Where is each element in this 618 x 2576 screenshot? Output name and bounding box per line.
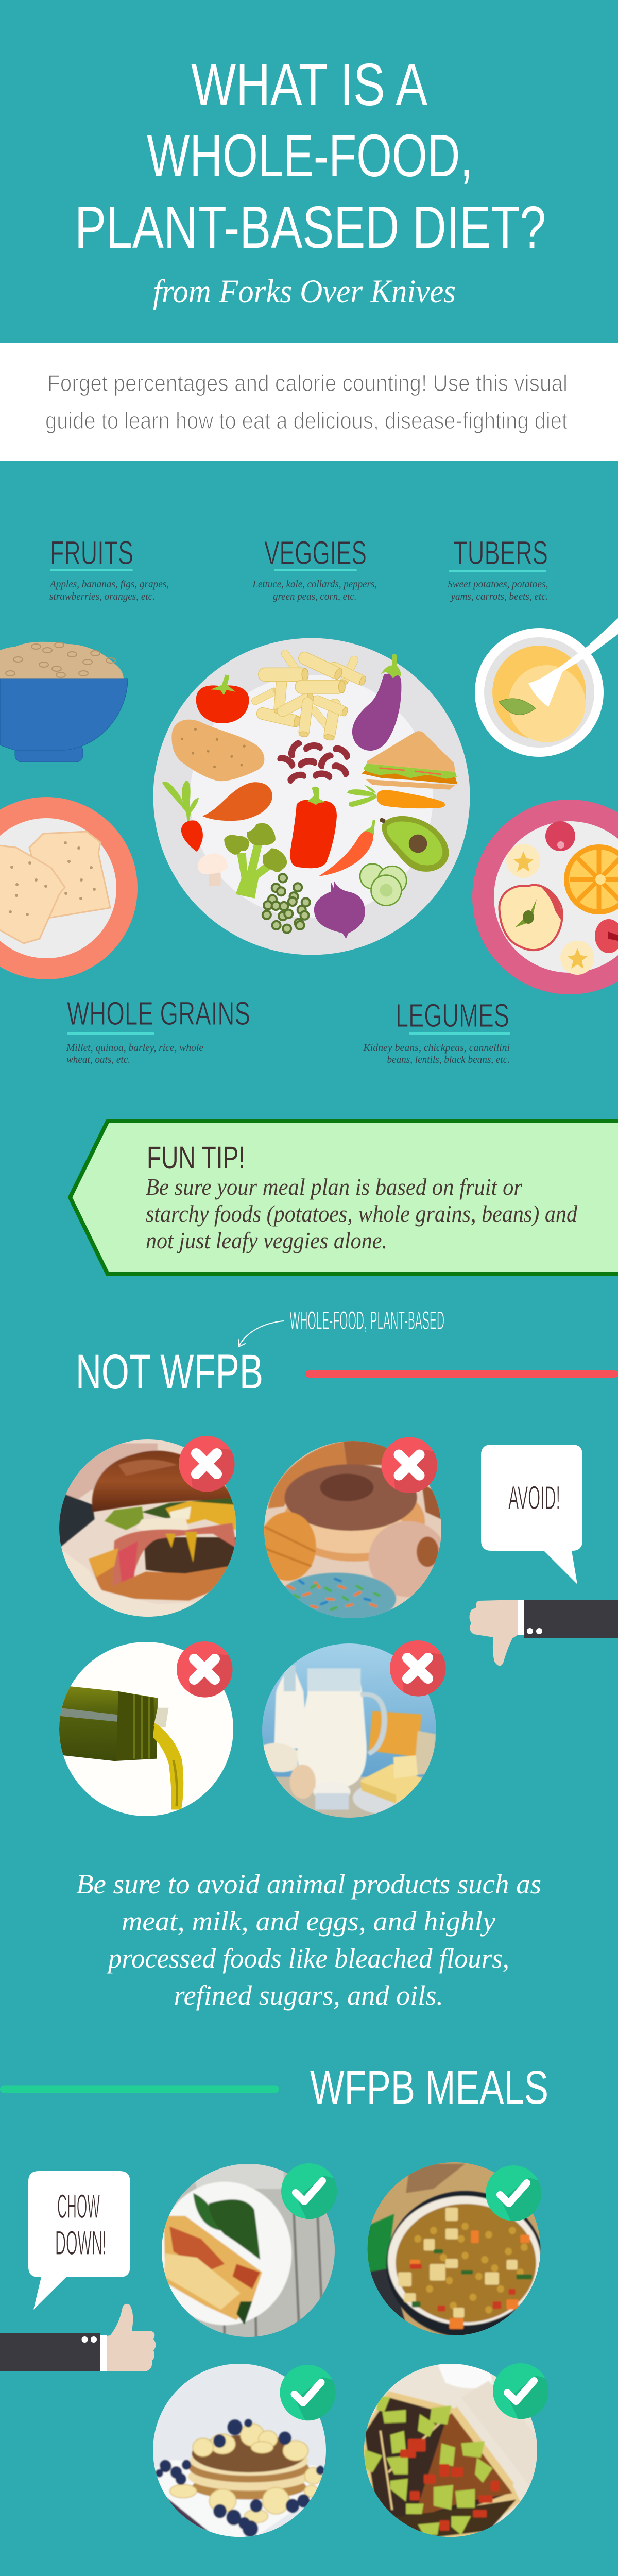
category: fruits: strawberries, oranges, etc.: [49, 591, 155, 602]
text: avoid explanation: processed foods like bleached flours,: [106, 1943, 509, 1974]
icon: red x donuts: [381, 1437, 437, 1493]
speech bubble: chow down: [28, 2171, 130, 2310]
icon: green check pizza: [493, 2363, 548, 2419]
category: fruits: [49, 534, 169, 602]
speech bubble: chow down: DOWN!: [55, 2224, 107, 2262]
bread plate: [0, 797, 138, 979]
green divider: [0, 2086, 279, 2093]
small carrot: [347, 785, 445, 808]
icon: red x burger: [179, 1436, 235, 1492]
text: avoid explanation: refined sugars, and oils.: [174, 1980, 443, 2011]
photo: burger: [55, 1437, 242, 1620]
red divider: [305, 1370, 618, 1378]
icon: green check stew: [486, 2165, 541, 2221]
text: avoid explanation: Be sure to avoid animal products such as: [76, 1869, 541, 1900]
speech bubble: chow down: CHOW: [57, 2187, 100, 2225]
category: veggies: green peas, corn, etc.: [273, 591, 356, 602]
category: tubers: [448, 534, 548, 602]
pasta: [250, 649, 367, 741]
category: tubers: TUBERS: [453, 534, 548, 571]
soup bowl with spoon: [475, 618, 618, 757]
chili: [318, 820, 375, 876]
photo: donuts: [260, 1439, 448, 1625]
icon: red x dairy: [390, 1640, 446, 1697]
category: veggies: [252, 534, 377, 602]
cucumbers: [360, 864, 406, 906]
category: whole grains: [66, 995, 250, 1065]
callout: fun tip: FUN TIP!: [147, 1140, 245, 1175]
mushroom: [198, 853, 228, 886]
peas: [263, 874, 310, 933]
category: legumes: beans, lentils, black beans, etc.: [387, 1054, 510, 1065]
text: avoid explanation: meat, milk, and eggs, and highly: [122, 1906, 495, 1937]
bell pepper: [290, 787, 337, 868]
icon: thumbs down hand: [470, 1600, 618, 1666]
icon: green check pancakes: [280, 2365, 336, 2420]
photo: pancakes: [149, 2362, 331, 2540]
photo: pizza: [360, 2360, 541, 2540]
broccoli: [224, 823, 287, 899]
category: veggies: Lettuce, kale, collards, peppers,: [252, 579, 377, 590]
text: avoid explanation: [76, 1869, 541, 2011]
intro band: Forget percentages and calorie counting! Use this visual: [47, 370, 568, 396]
intro band: guide to learn how to eat a delicious, disease-fighting diet: [45, 408, 568, 434]
photo: dairy: [262, 1643, 436, 1818]
fruit plate: [472, 800, 618, 994]
photo: olive oil: [55, 1638, 237, 1819]
arrow to not wfpb: [238, 1321, 284, 1347]
potato: [171, 720, 264, 781]
radish: [162, 781, 203, 852]
callout: fun tip: not just leafy veggies alone.: [146, 1227, 387, 1253]
category: fruits: Apples, bananas, figs, grapes,: [49, 579, 169, 590]
subtitle: from Forks Over Knives: from Forks Over Knives: [153, 273, 456, 310]
callout: fun tip: starchy foods (potatoes, whole grains, beans) and: [146, 1200, 578, 1227]
intro band: [0, 343, 618, 461]
photo: lentil stew: [363, 2159, 544, 2339]
callout: fun tip: Be sure your meal plan is based on fruit or: [146, 1174, 523, 1200]
beet: [314, 882, 365, 939]
title: WHAT IS A: [191, 51, 427, 118]
category: whole grains: Millet, quinoa, barley, rice, whole: [66, 1042, 203, 1054]
eggplant: [352, 654, 401, 751]
callout: fun tip: [70, 1121, 618, 1274]
icon: green check lasagna: [281, 2163, 337, 2219]
icon: thumbs up hand: [0, 2304, 156, 2371]
category: whole grains: WHOLE GRAINS: [67, 995, 250, 1032]
icon: red x oil: [177, 1641, 233, 1698]
speech bubble: avoid: AVOID!: [508, 1479, 560, 1516]
category: whole grains: wheat, oats, etc.: [66, 1054, 130, 1065]
category: legumes: LEGUMES: [396, 997, 509, 1034]
bowl of grains: [0, 642, 128, 762]
speech bubble: avoid: [481, 1445, 582, 1584]
title: [75, 51, 546, 261]
category: fruits: FRUITS: [50, 534, 133, 571]
photo: lasagna: [158, 2161, 340, 2342]
category: legumes: [363, 997, 510, 1065]
category: veggies: VEGGIES: [264, 534, 367, 571]
category: tubers: Sweet potatoes, potatoes,: [448, 579, 548, 590]
category: tubers: yams, carrots, beets, etc.: [450, 591, 548, 602]
heading: wfpb meals: WFPB MEALS: [310, 2061, 548, 2114]
sandwich: [362, 731, 457, 790]
category: legumes: Kidney beans, chickpeas, cannellini: [363, 1042, 510, 1054]
avocado: [379, 816, 449, 872]
tomato: [196, 674, 249, 723]
title: WHOLE-FOOD,: [147, 122, 473, 189]
kidney beans: [276, 738, 353, 785]
main plate with foods: [153, 638, 470, 955]
heading: not wfpb: NOT WFPB: [76, 1345, 263, 1399]
big carrot: [202, 782, 272, 821]
